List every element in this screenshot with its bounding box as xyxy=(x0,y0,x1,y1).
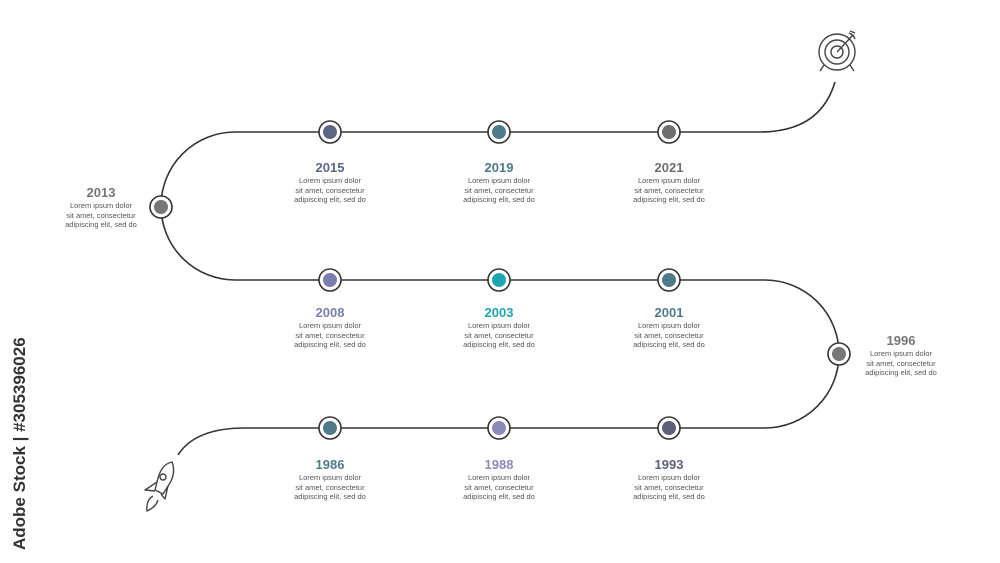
label 2013: Lorem ipsum dolor xyxy=(70,201,132,210)
label 2021 xyxy=(633,160,705,204)
label 2001: adipiscing elit, sed do xyxy=(633,340,705,349)
label 2015 xyxy=(294,160,366,204)
label 1996: Lorem ipsum dolor xyxy=(870,349,932,358)
label 1993: adipiscing elit, sed do xyxy=(633,492,705,501)
label 2021: sit amet, consectetur xyxy=(634,186,704,194)
label 2008: 2008 xyxy=(316,305,344,320)
label 1988: adipiscing elit, sed do xyxy=(463,492,535,501)
label 2008: sit amet, consectetur xyxy=(295,330,365,340)
label 1993 xyxy=(633,457,705,501)
label 1988: 1988 xyxy=(485,457,513,472)
label 2019 xyxy=(463,160,535,204)
label 1996 xyxy=(865,333,937,377)
label 2008: adipiscing elit, sed do xyxy=(294,340,366,349)
label 1996: 1996 xyxy=(887,333,915,348)
label 1996: sit amet, consectetur xyxy=(866,358,936,368)
label 1986: sit amet, consectetur xyxy=(295,482,365,492)
label 1993: sit amet, consectetur xyxy=(634,482,704,492)
label 2003: Lorem ipsum dolor xyxy=(468,321,530,330)
label 1996: adipiscing elit, sed do xyxy=(865,368,937,377)
label 2021: 2021 xyxy=(655,160,683,175)
label 2003: 2003 xyxy=(485,305,513,320)
label 2019: Lorem ipsum dolor xyxy=(468,176,530,185)
label 2021: adipiscing elit, sed do xyxy=(633,195,705,204)
label 1988: sit amet, consectetur xyxy=(464,482,534,492)
label 1986: 1986 xyxy=(316,457,344,472)
label 1993: Lorem ipsum dolor xyxy=(638,473,700,482)
label 2003: adipiscing elit, sed do xyxy=(463,340,535,349)
label 2001: Lorem ipsum dolor xyxy=(638,321,700,330)
label 2015: 2015 xyxy=(316,160,344,175)
label 2019: adipiscing elit, sed do xyxy=(463,195,535,204)
label 2019: 2019 xyxy=(485,160,513,175)
label 2003 xyxy=(463,305,535,349)
label 1986 xyxy=(294,457,366,501)
label 2013: sit amet, consectetur xyxy=(66,210,136,220)
label 2001 xyxy=(633,305,705,349)
label 2001: 2001 xyxy=(655,305,683,320)
label 2013: adipiscing elit, sed do xyxy=(65,220,137,229)
node markers xyxy=(150,121,850,439)
label 2015: Lorem ipsum dolor xyxy=(299,176,361,185)
path xyxy=(161,82,839,455)
label 2013 xyxy=(65,185,137,229)
watermark vertical text: Adobe Stock | #305396026 xyxy=(10,337,29,550)
icon: target xyxy=(819,31,855,71)
label 1986: Lorem ipsum dolor xyxy=(299,473,361,482)
label 2013: 2013 xyxy=(87,185,115,200)
label 2008 xyxy=(294,305,366,349)
label 1988 xyxy=(463,457,535,501)
label 2003: sit amet, consectetur xyxy=(464,330,534,340)
icon: rocket xyxy=(145,462,174,511)
label 2001: sit amet, consectetur xyxy=(634,330,704,340)
label 2015: sit amet, consectetur xyxy=(295,186,365,194)
label 2021: Lorem ipsum dolor xyxy=(638,176,700,185)
label 1993: 1993 xyxy=(655,457,683,472)
label 2015: adipiscing elit, sed do xyxy=(294,195,366,204)
label 2008: Lorem ipsum dolor xyxy=(299,321,361,330)
label 1988: Lorem ipsum dolor xyxy=(468,473,530,482)
label 1986: adipiscing elit, sed do xyxy=(294,492,366,501)
label 2019: sit amet, consectetur xyxy=(464,186,534,194)
